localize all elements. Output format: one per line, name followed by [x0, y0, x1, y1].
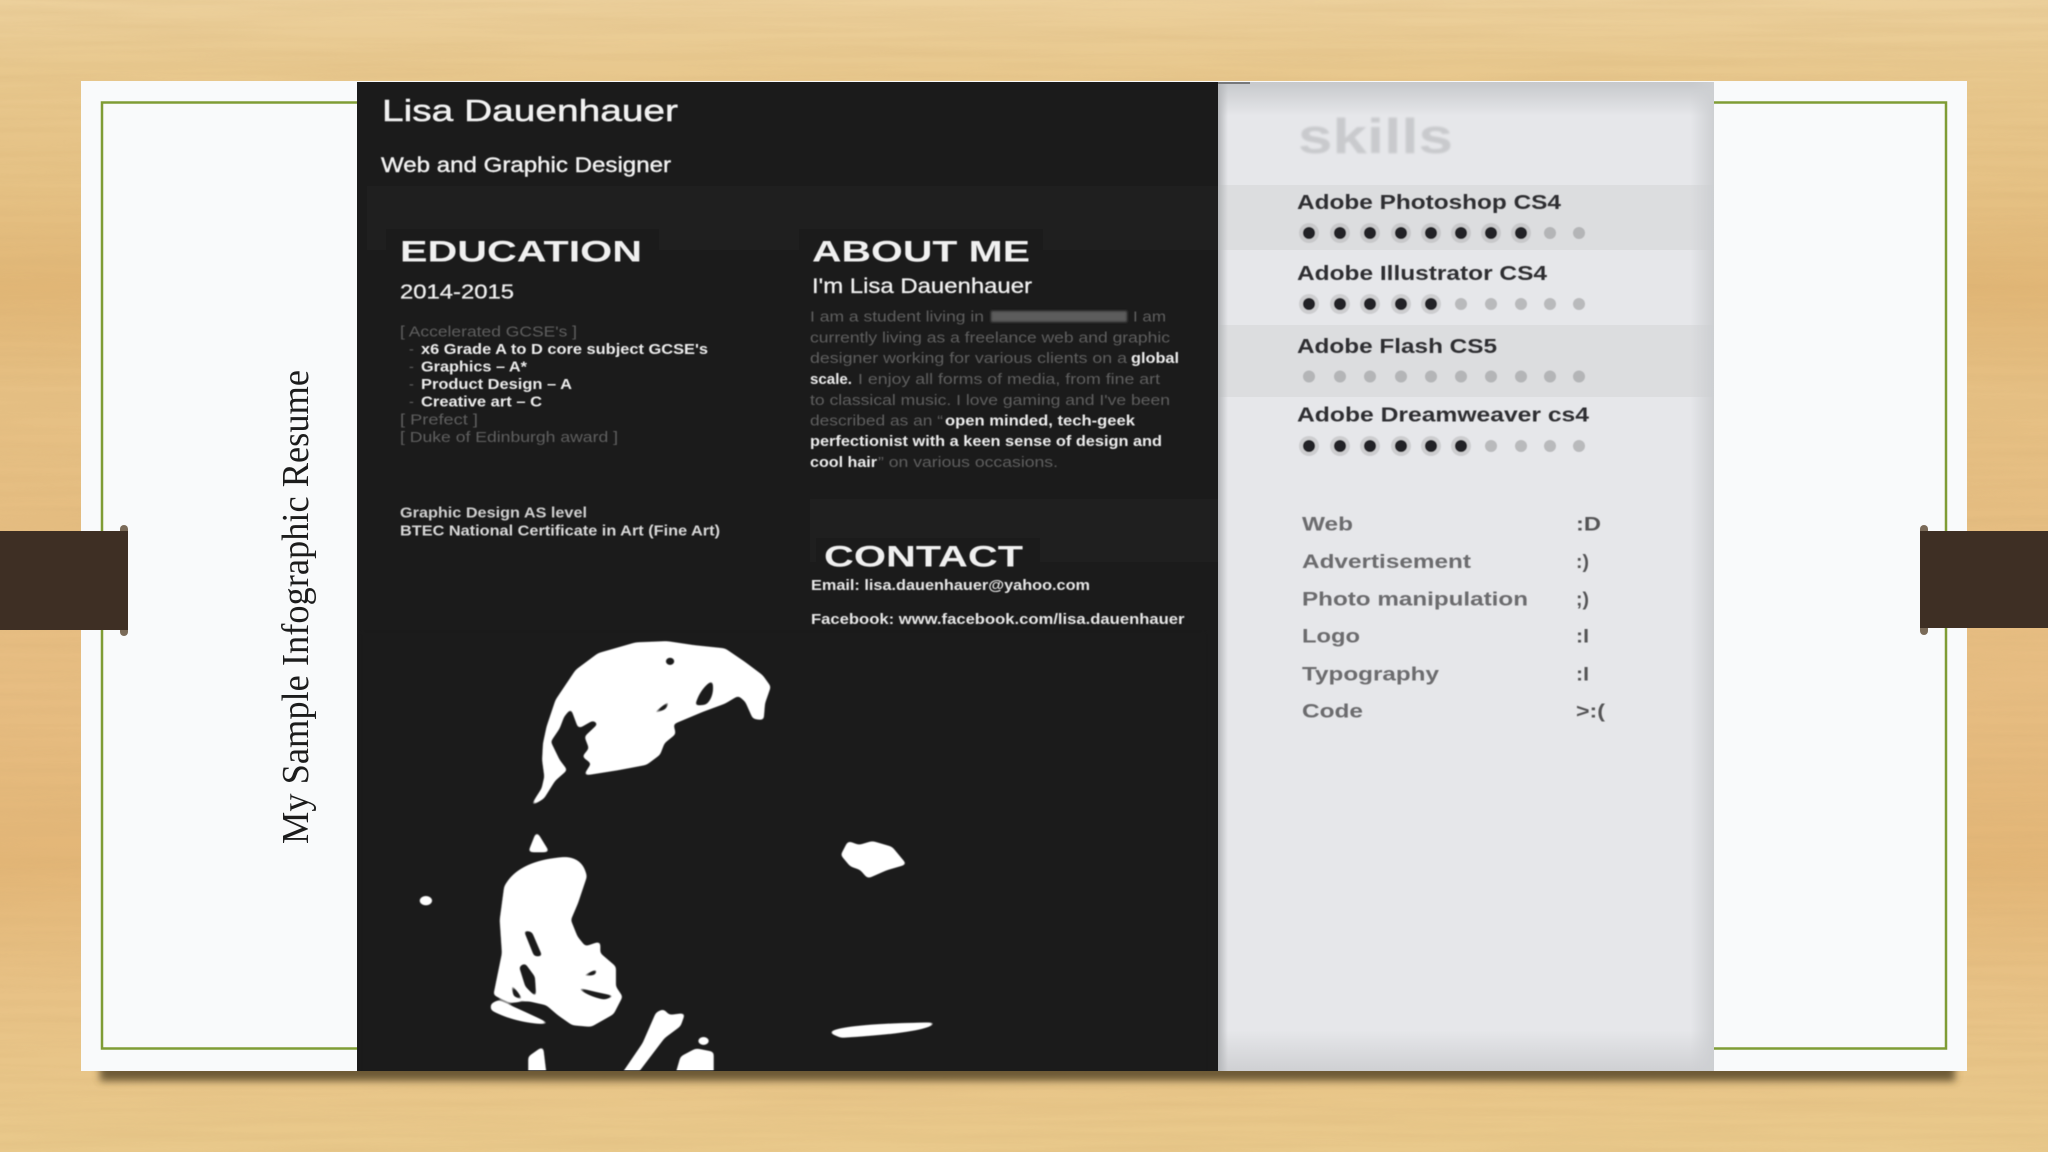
- about me section: I am a student living in: [810, 310, 984, 326]
- panel: skills column: [1218, 82, 1714, 1071]
- education section: [400, 236, 720, 540]
- about me section: ” on various occasions.: [878, 455, 1058, 471]
- education section: Product Design – A: [421, 377, 573, 393]
- high-contrast portrait silhouette: [418, 640, 934, 1070]
- education section: 2014-2015: [400, 282, 514, 304]
- contact section: CONTACT: [824, 540, 1023, 574]
- preference list with emoticons: :): [1576, 551, 1589, 573]
- education section: Graphic Design AS level: [400, 506, 587, 522]
- education section: EDUCATION: [400, 236, 642, 268]
- preference list with emoticons: Typography: [1302, 664, 1439, 686]
- education section: Creative art – C: [421, 394, 543, 410]
- education section: -: [409, 360, 414, 376]
- preference list with emoticons: Advertisement: [1302, 551, 1472, 573]
- green inner frame: [102, 102, 1946, 1048]
- header: name and role: Web and Graphic Designer: [381, 154, 671, 177]
- about me section: currently living as a freelance web and graphic: [810, 330, 1170, 346]
- preference list with emoticons: :I: [1576, 664, 1589, 686]
- about me section: I enjoy all forms of media, from fine art: [858, 372, 1160, 388]
- education section: [ Accelerated GCSE's ]: [400, 324, 577, 340]
- preference list with emoticons: :I: [1576, 626, 1589, 648]
- education section: [ Prefect ]: [400, 412, 478, 428]
- about me section: I am: [1133, 310, 1166, 326]
- eye highlight: [841, 841, 906, 878]
- preference list with emoticons: >:(: [1576, 700, 1606, 722]
- preference list with emoticons: [1302, 514, 1606, 722]
- skill: Illustrator: Adobe Illustrator CS4: [1297, 263, 1548, 285]
- education section: -: [409, 394, 414, 410]
- preference list with emoticons: ;): [1576, 588, 1589, 610]
- contact section: Facebook: www.facebook.com/lisa.dauenhauer: [811, 611, 1185, 628]
- skill: Photoshop: Adobe Photoshop CS4: [1297, 192, 1562, 214]
- preference list with emoticons: Web: [1302, 514, 1353, 536]
- education section: -: [409, 342, 414, 358]
- preference list with emoticons: Logo: [1302, 626, 1360, 648]
- right brown strap: [1920, 525, 2048, 635]
- about me section: cool hair: [810, 455, 877, 471]
- preference list with emoticons: Photo manipulation: [1302, 588, 1528, 610]
- about me section: I'm Lisa Dauenhauer: [812, 275, 1032, 298]
- collar and hand highlights: [491, 1000, 550, 1024]
- about me section: designer working for various clients on a: [810, 351, 1128, 367]
- about me section: scale.: [810, 372, 852, 388]
- skill: Photoshop: [1297, 192, 1585, 243]
- left brown strap: [0, 525, 128, 636]
- education section: [ Duke of Edinburgh award ]: [400, 430, 618, 446]
- hair highlight: [530, 641, 771, 807]
- about me section: global: [1131, 351, 1179, 367]
- header: name and role: [381, 93, 678, 177]
- face highlight: [494, 857, 622, 1027]
- preference list with emoticons: :D: [1576, 514, 1601, 536]
- skill: Dreamweaver: [1297, 404, 1590, 456]
- header: name and role: Lisa Dauenhauer: [382, 93, 678, 128]
- education section: x6 Grade A to D core subject GCSE's: [421, 342, 708, 358]
- about me section: ABOUT ME: [812, 236, 1030, 268]
- about me section: perfectionist with a keen sense of design and: [810, 434, 1162, 450]
- vertical slide title: My Sample Infographic Resume: [275, 370, 317, 844]
- about me section: to classical music. I love gaming and I've been: [810, 393, 1170, 409]
- contact section: Email: lisa.dauenhauer@yahoo.com: [811, 577, 1090, 594]
- skill: Illustrator: [1297, 263, 1585, 314]
- education section: Graphics – A*: [421, 360, 527, 376]
- about me section: open minded, tech-geek: [945, 414, 1136, 430]
- about me section: described as an “: [810, 414, 943, 430]
- sleeve highlight: [829, 1023, 936, 1038]
- panel: dark resume column: [357, 82, 1218, 1097]
- skills heading: skills: [1298, 110, 1453, 164]
- skill: Flash: Adobe Flash CS5: [1297, 336, 1497, 358]
- skill: Dreamweaver: Adobe Dreamweaver cs4: [1297, 404, 1590, 426]
- contact section: [811, 540, 1185, 628]
- skill: Flash: [1297, 336, 1585, 382]
- education section: BTEC National Certificate in Art (Fine Art): [400, 524, 720, 540]
- preference list with emoticons: Code: [1302, 700, 1363, 722]
- card drop shadow: [100, 1062, 1955, 1081]
- education section: -: [409, 377, 414, 393]
- about me section: [810, 236, 1179, 471]
- white slide card: [81, 81, 1967, 1071]
